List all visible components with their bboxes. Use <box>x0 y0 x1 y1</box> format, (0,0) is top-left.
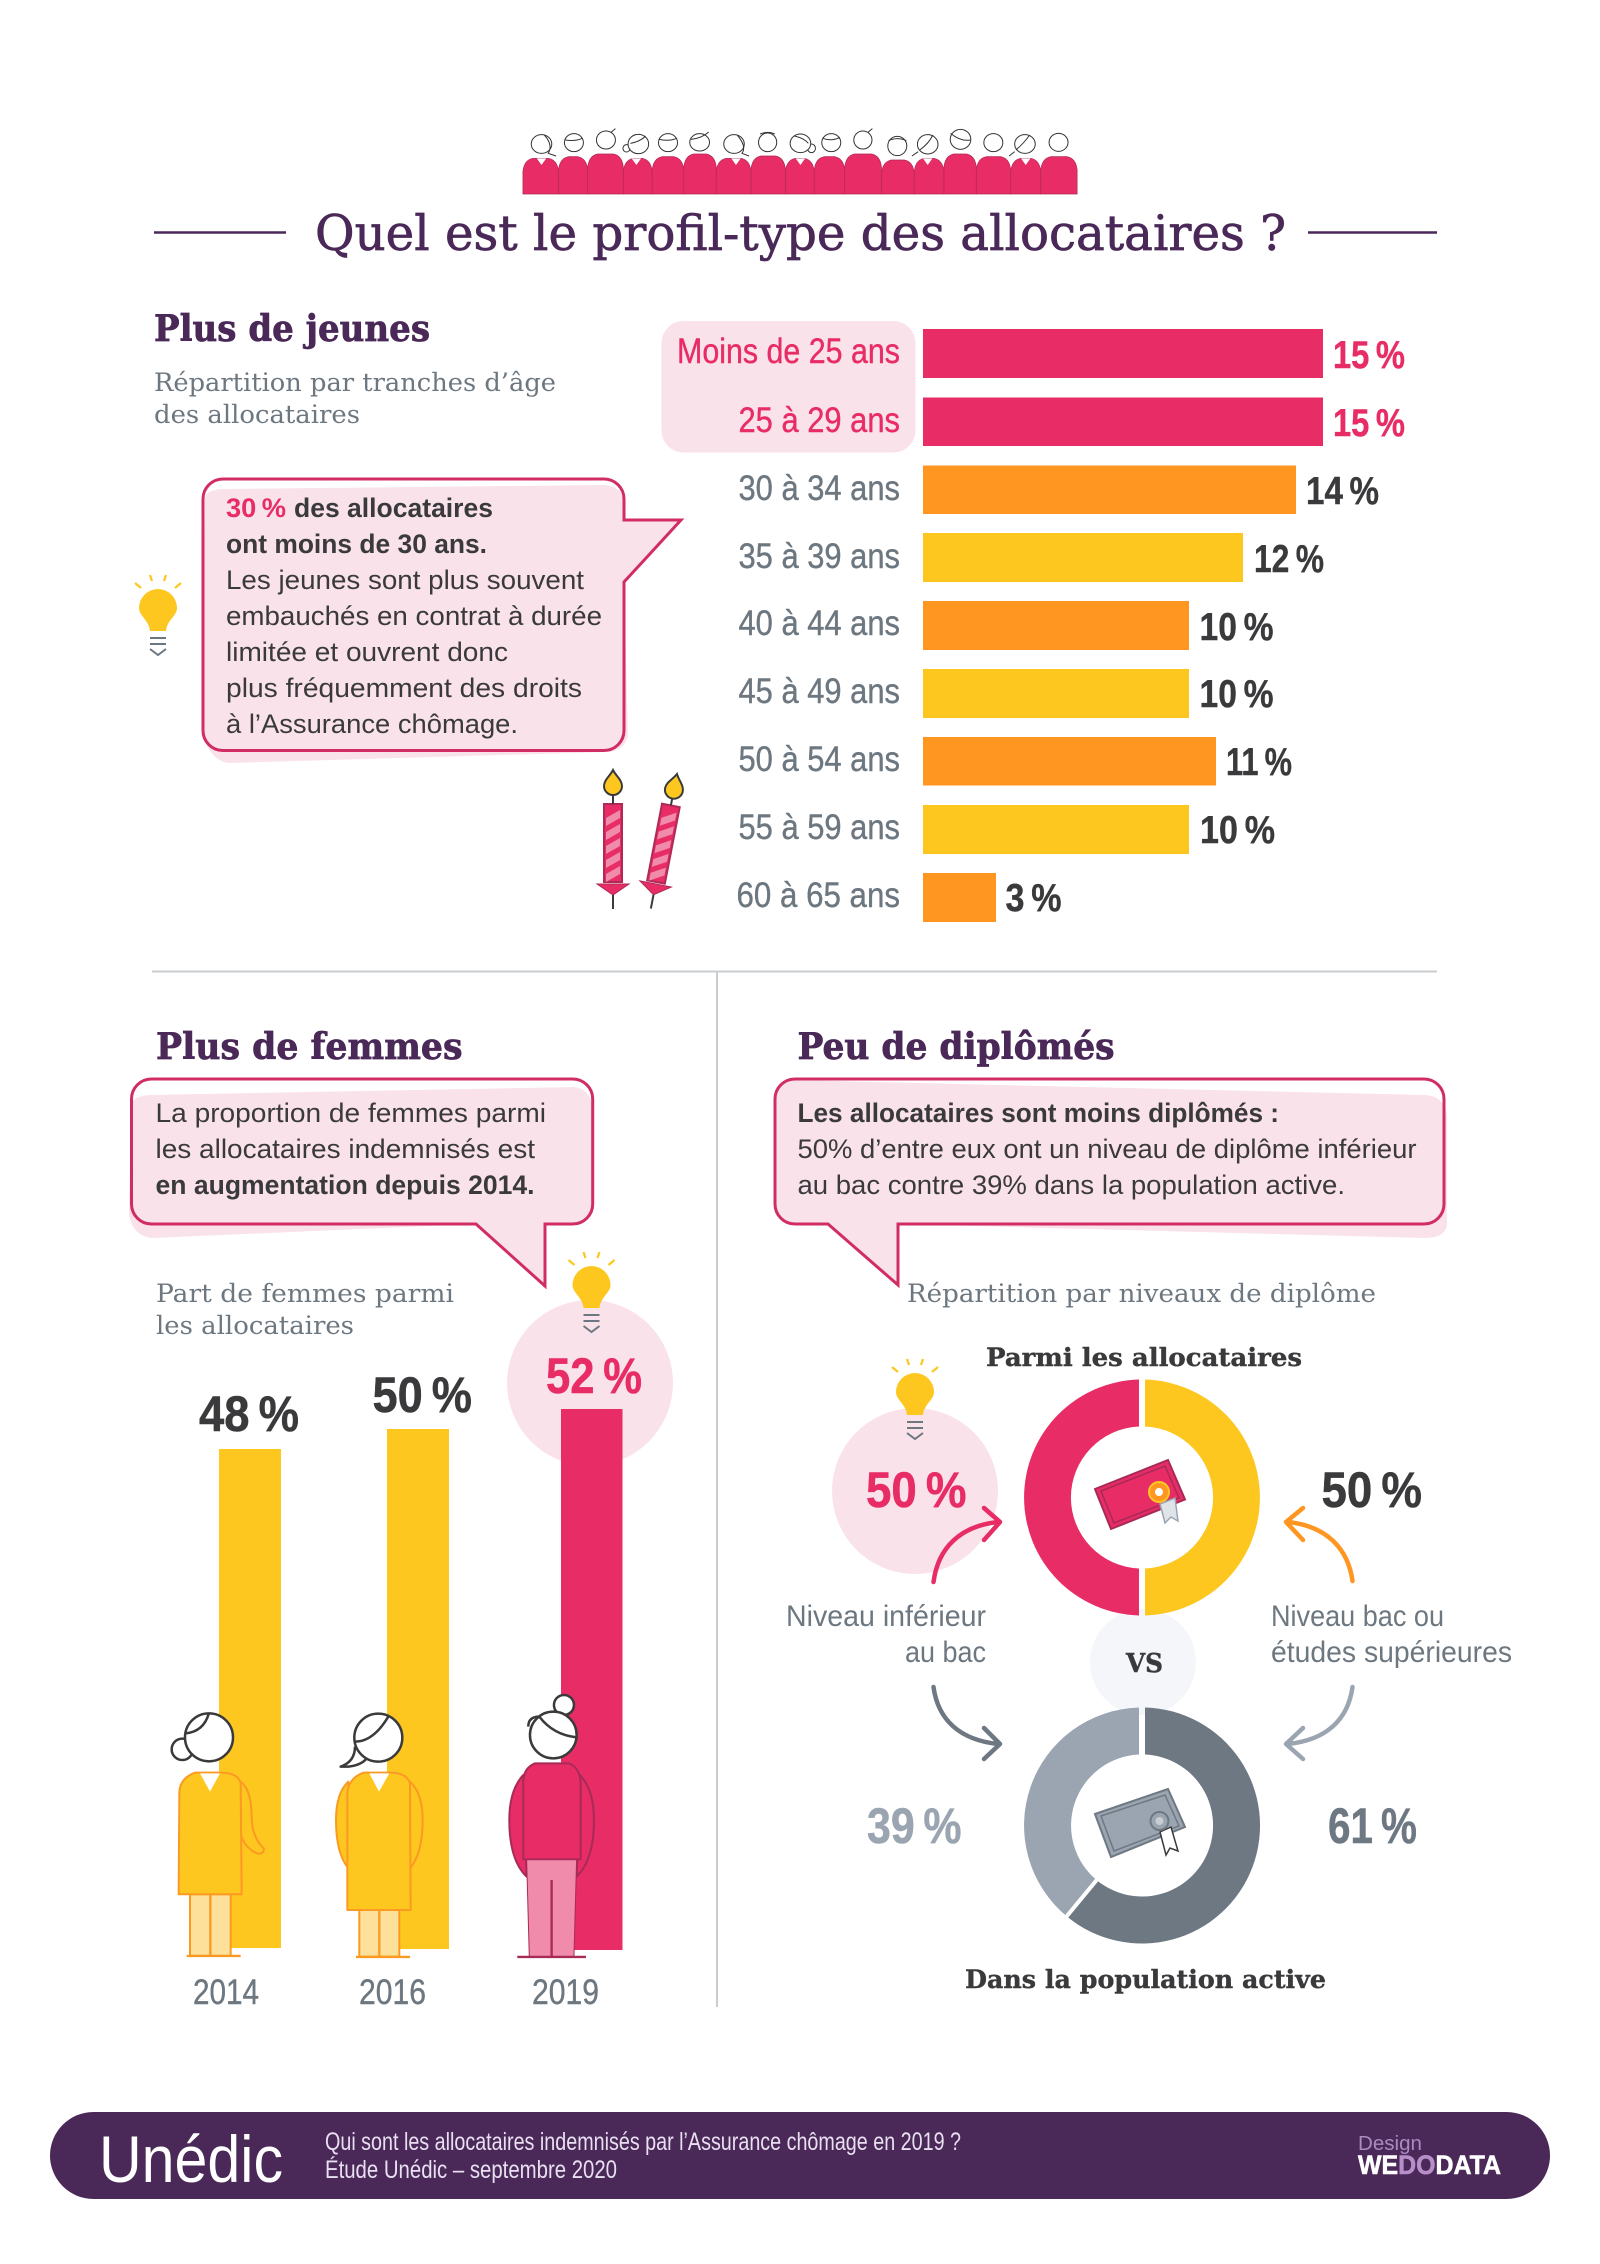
panel: peu de diplômés <box>775 1026 1512 1994</box>
callout: 30 percent under 30 <box>203 479 681 763</box>
bar chart: age groups: Moins de 25 ans <box>677 332 900 371</box>
footer <box>50 2112 1550 2199</box>
icon: lightbulb <box>135 575 181 655</box>
subheading: part de femmes: les allocataires <box>156 1311 354 1340</box>
bar chart: age groups: 3 % <box>1006 877 1062 920</box>
bar chart: age groups: 14 % <box>1306 470 1379 513</box>
icon: candle left <box>597 770 629 909</box>
value: 39 percent: 39 % <box>867 1798 962 1854</box>
woman figure 2016 <box>336 1714 423 1957</box>
callout: women proportion: en augmentation depuis 2014. <box>156 1170 534 1200</box>
value: 50 percent below bac: 50 % <box>866 1462 966 1518</box>
bar chart: share of women: 50 % <box>372 1367 472 1423</box>
label: niveau bac ou études supérieures: Niveau bac ou <box>1271 1600 1444 1633</box>
callout: 30 percent under 30: Les jeunes sont plus souvent <box>226 565 585 595</box>
vs badge: VS <box>1125 1649 1163 1679</box>
bar chart: age groups: 15 % <box>1333 334 1405 377</box>
heading: plus de jeunes: Plus de jeunes <box>154 308 430 350</box>
label: niveau bac ou études supérieures <box>1271 1600 1512 1669</box>
icon: grey diploma <box>1095 1789 1185 1857</box>
source text: Qui sont les allocataires indemnisés par l’Assurance chômage en 2019 ? <box>325 2128 961 2156</box>
bar chart: age groups: 12 % <box>1254 538 1324 581</box>
bar chart: age groups: 25 à 29 ans <box>738 401 900 440</box>
panel: plus de femmes <box>129 1026 673 2012</box>
source text: Étude Unédic – septembre 2020 <box>325 2155 617 2184</box>
value: 50 percent bac or higher: 50 % <box>1322 1462 1422 1518</box>
bar chart: age groups: 11 % <box>1226 741 1292 784</box>
bar chart: age groups: 55 à 59 ans <box>738 808 900 847</box>
label: niveau bac ou études supérieures: études supérieures <box>1271 1636 1512 1669</box>
callout: diplomas: Les allocataires sont moins diplômés : <box>798 1098 1279 1128</box>
bar chart: age groups: 60 à 65 ans <box>736 876 900 915</box>
icon: lightbulb <box>568 1252 614 1332</box>
callout: 30 percent under 30: embauchés en contrat à durée <box>226 601 602 631</box>
woman figure 2019 <box>509 1695 594 1957</box>
label: dans la population active: Dans la population active <box>965 1965 1326 1994</box>
subheading: age distribution <box>154 368 556 429</box>
callout: women proportion: La proportion de femmes parmi <box>156 1098 546 1128</box>
label: niveau inférieur au bac <box>786 1600 986 1669</box>
donut chart: allocataires <box>1024 1380 1260 1615</box>
label: niveau inférieur au bac: Niveau inférieur <box>786 1600 986 1633</box>
year labels <box>193 1973 599 2012</box>
bar chart: age groups: 15 % <box>1333 402 1405 445</box>
arrow: red to donut <box>934 1508 1000 1582</box>
highlight circle: 52 percent <box>507 1300 673 1466</box>
bar chart: age groups: 10 % <box>1200 673 1274 716</box>
bar chart: share of women: 48 % <box>199 1386 299 1442</box>
arrow: orange to donut <box>1286 1508 1352 1581</box>
subheading: part de femmes <box>156 1279 454 1340</box>
callout: diplomas <box>775 1079 1447 1285</box>
callout: 30 percent under 30: 30 % <box>226 493 286 523</box>
arrow: dark grey to donut <box>934 1687 1000 1759</box>
label: niveau inférieur au bac: au bac <box>905 1636 986 1669</box>
bar chart: share of women <box>199 1348 642 1950</box>
subheading: part de femmes: Part de femmes parmi <box>156 1279 454 1308</box>
logo: Unédic: Unédic <box>99 2122 283 2196</box>
credit: design wedodata: Design <box>1358 2133 1422 2155</box>
source text <box>325 2128 961 2184</box>
heading: peu de diplômés: Peu de diplômés <box>798 1026 1114 1068</box>
bar chart: age groups <box>662 321 1405 922</box>
icon: lightbulb <box>892 1359 938 1439</box>
year labels: 2014 <box>193 1973 259 2012</box>
credit: design wedodata: WEDODATA <box>1358 2150 1501 2180</box>
callout: diplomas: au bac contre 39% dans la population active. <box>798 1170 1345 1200</box>
vs badge <box>1090 1609 1196 1715</box>
callout: 30 percent under 30: des allocataires <box>294 493 493 523</box>
icon: row of people <box>523 129 1077 194</box>
subheading: age distribution: Répartition par tranches d’âge <box>154 368 556 397</box>
callout: 30 percent under 30: à l’Assurance chômage. <box>226 709 518 739</box>
bar chart: age groups: 35 à 39 ans <box>738 537 900 576</box>
year labels: 2019 <box>532 1973 599 2012</box>
heading: plus de femmes: Plus de femmes <box>156 1026 462 1068</box>
label: parmi les allocataires: Parmi les allocataires <box>986 1343 1302 1372</box>
callout: 30 percent under 30: limitée et ouvrent donc <box>226 637 508 667</box>
year labels: 2016 <box>359 1973 426 2012</box>
bar chart: age groups: 30 à 34 ans <box>738 469 900 508</box>
subheading: diploma levels: Répartition par niveaux de diplôme <box>907 1279 1376 1308</box>
panel: plus de jeunes <box>135 308 1405 922</box>
credit: design wedodata <box>1358 2133 1501 2180</box>
bar chart: age groups: 50 à 54 ans <box>738 740 900 779</box>
title: Quel est le profil-type des allocataires ? <box>315 205 1286 262</box>
callout: diplomas: 50% d’entre eux ont un niveau de diplôme inférieur <box>798 1134 1417 1164</box>
callout: 30 percent under 30: plus fréquemment des droits <box>226 673 582 703</box>
bar chart: age groups: 10 % <box>1200 809 1275 852</box>
callout: 30 percent under 30: ont moins de 30 ans. <box>226 529 487 559</box>
callout: women proportion: les allocataires indemnisés est <box>156 1134 536 1164</box>
callout: women proportion <box>129 1079 593 1286</box>
arrow: light grey to donut <box>1286 1687 1352 1759</box>
bar chart: age groups: 10 % <box>1200 606 1274 649</box>
bar chart: share of women: 52 % <box>546 1348 642 1404</box>
bar chart: age groups: 40 à 44 ans <box>738 604 900 643</box>
icon: candle right <box>635 771 693 912</box>
donut chart: population active <box>1024 1708 1260 1944</box>
subheading: age distribution: des allocataires <box>154 400 360 429</box>
woman figure 2014 <box>172 1713 264 1956</box>
highlight circle: 50 percent <box>832 1408 998 1574</box>
bar chart: age groups: 45 à 49 ans <box>738 672 900 711</box>
value: 61 percent: 61 % <box>1328 1798 1417 1854</box>
icon: red diploma <box>1095 1460 1185 1529</box>
